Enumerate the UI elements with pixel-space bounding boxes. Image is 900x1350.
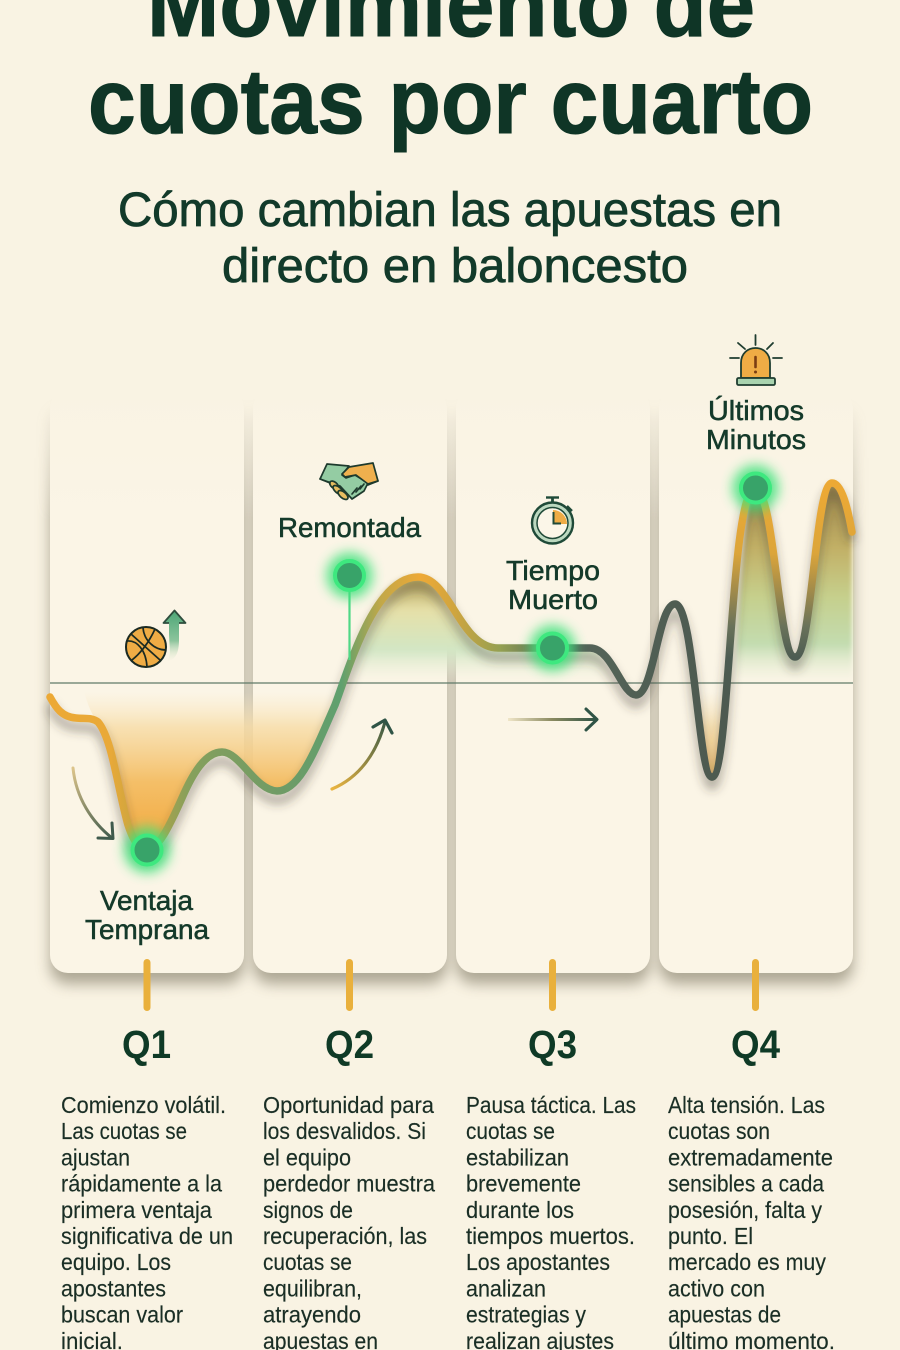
text block: Q2: cuotas se: [263, 1249, 352, 1275]
area: above baseline Q4: [734, 483, 852, 683]
subtitle: Cómo cambian las apuestas en: [118, 184, 782, 237]
curve: [50, 577, 712, 850]
title: cuotas por cuarto: [88, 51, 813, 153]
text block: Q4: punto. El: [668, 1223, 753, 1249]
icon: alarm siren: [730, 335, 782, 385]
text block: Q4: [668, 1092, 835, 1350]
text block: Q2: equilibran,: [263, 1275, 362, 1301]
text block: Q2: perdedor muestra: [263, 1171, 436, 1197]
text block: Q2: los desvalidos. Si: [263, 1118, 426, 1144]
text block: Q4: mercado es muy: [668, 1249, 826, 1275]
subtitle: [118, 184, 782, 293]
text block: Q3: cuotas se: [466, 1118, 555, 1144]
area: above baseline Q2-Q3: [348, 577, 618, 683]
text block: Q1: equipo. Los: [61, 1249, 171, 1275]
text block: Q4: cuotas son: [668, 1118, 770, 1144]
subtitle: directo en baloncesto: [222, 240, 688, 293]
curve shadow: [50, 492, 852, 859]
label: Tiempo Muerto: Tiempo: [506, 555, 600, 586]
text block: Q1: rápidamente a la: [61, 1171, 223, 1197]
icon: basketball with up arrow: [126, 610, 186, 667]
area: below baseline: [84, 692, 345, 850]
text block: Q3: Los apostantes: [466, 1249, 610, 1275]
timeline ticks: [144, 959, 759, 1011]
label: Remontada: Remontada: [278, 512, 421, 543]
icon: handshake: [320, 463, 378, 501]
heading: Q3: Q3: [528, 1023, 577, 1067]
text block: Q4: sensibles a cada: [668, 1171, 825, 1197]
chart panels: [50, 390, 853, 984]
text block: Q4: extremadamente: [668, 1144, 833, 1170]
heading: Q4: Q4: [731, 1023, 781, 1067]
text block: Q3: [466, 1092, 636, 1350]
text block: Q2: [263, 1092, 436, 1350]
label: Ventaja Temprana: Ventaja: [100, 885, 193, 916]
text block: Q1: significativa de un: [61, 1223, 233, 1249]
icon: stopwatch: [532, 498, 573, 544]
text block: Q3: estrategias y: [466, 1302, 586, 1328]
text block: Q4: posesión, falta y: [668, 1197, 822, 1223]
text block: Q3: estabilizan: [466, 1144, 569, 1170]
title: [88, 0, 813, 153]
heading: Q2: Q2: [325, 1023, 374, 1067]
text block: Q3: durante los: [466, 1197, 574, 1223]
arrow: Q3 flat: [508, 709, 597, 730]
text block: Q3: brevemente: [466, 1171, 581, 1197]
connector: Remontada: [348, 588, 351, 660]
line chart: odds movement: [50, 483, 853, 859]
marker: Ventaja Temprana: [124, 827, 170, 873]
heading: Q1: Q1: [122, 1023, 171, 1067]
label: Ventaja Temprana: [85, 885, 209, 945]
label: Últimos Minutos: Minutos: [706, 424, 806, 455]
text block: Q3: tiempos muertos.: [466, 1223, 635, 1249]
baseline: [50, 682, 853, 684]
area: Q4 dip: [698, 690, 727, 777]
text block: Q2: atrayendo: [263, 1302, 361, 1328]
text block: Q2: el equipo: [263, 1144, 351, 1170]
text block: Q2: signos de: [263, 1197, 353, 1223]
text block: Q1: buscan valor: [61, 1302, 183, 1328]
text block: Q1: primera ventaja: [61, 1197, 213, 1223]
text block: Q1: ajustan: [61, 1144, 130, 1170]
marker: Últimos Minutos: [732, 465, 778, 511]
text block: Q1: [61, 1092, 233, 1350]
text block: Q2: recuperación, las: [263, 1223, 427, 1249]
label: Últimos Minutos: [706, 395, 806, 455]
text block: Q3: analizan: [466, 1275, 546, 1301]
curve: Q4 rise: [712, 483, 852, 777]
arrow: Q2 up: [332, 720, 392, 789]
text block: Q3: Pausa táctica. Las: [466, 1092, 636, 1118]
text block: Q1: Las cuotas se: [61, 1118, 187, 1144]
text block: Q1: apostantes: [61, 1275, 166, 1301]
label: Últimos Minutos: Últimos: [708, 395, 804, 426]
marker: Remontada: [326, 552, 372, 598]
text block: Q4: activo con: [668, 1275, 765, 1301]
text block: Q2: Oportunidad para: [263, 1092, 435, 1118]
text block: Q4: Alta tensión. Las: [668, 1092, 825, 1118]
text block: Q1: Comienzo volátil.: [61, 1092, 226, 1118]
label: Tiempo Muerto: [506, 555, 600, 615]
marker: Tiempo Muerto: [530, 625, 576, 671]
label: Tiempo Muerto: Muerto: [508, 584, 598, 615]
arrow: Q1 down: [73, 768, 113, 838]
text block: Q4: apuestas de: [668, 1302, 781, 1328]
label: Ventaja Temprana: Temprana: [85, 914, 209, 945]
